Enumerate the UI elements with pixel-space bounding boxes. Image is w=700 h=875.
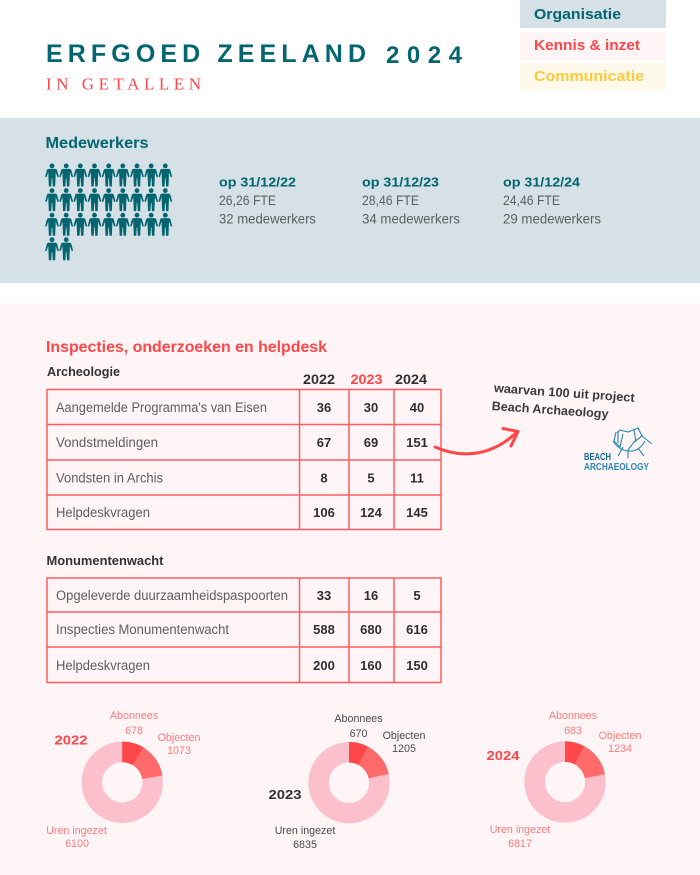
donut chart: 2023 bbox=[268, 713, 425, 851]
stat: 31/12/23: 34 medewerkers bbox=[362, 212, 460, 226]
table: archeologie: 11 bbox=[410, 470, 424, 486]
table: archeologie: Aangemelde Programma's van Eisen bbox=[56, 400, 267, 415]
legend: Organisatie bbox=[534, 6, 621, 23]
callout: beach archaeology: Beach Archaeology bbox=[491, 399, 609, 421]
stat: 31/12/22: op 31/12/22 bbox=[219, 176, 296, 190]
title: IN GETALLEN bbox=[46, 74, 201, 94]
stat: 31/12/24 bbox=[503, 176, 601, 226]
donut chart: 2022: 2022 bbox=[54, 732, 88, 748]
year headers bbox=[303, 372, 428, 387]
donut chart: 2023: Uren ingezet bbox=[275, 825, 335, 837]
table: archeologie: 67 bbox=[317, 435, 331, 450]
panel: inspecties, onderzoeken en helpdesk bbox=[0, 303, 700, 875]
donut chart: 2022: Uren ingezet bbox=[46, 825, 107, 837]
logo: beach archaeology bbox=[584, 428, 652, 473]
table: monumentenwacht: 200 bbox=[313, 658, 335, 673]
stat: 31/12/24: op 31/12/24 bbox=[503, 176, 580, 190]
title: ERFGOED ZEELAND bbox=[46, 40, 366, 68]
donut chart: 2022: 678 bbox=[125, 725, 143, 737]
donut chart: 2022: Objecten bbox=[158, 732, 200, 744]
table: archeologie: 5 bbox=[367, 470, 375, 486]
title: 2024 bbox=[386, 42, 463, 69]
table: monumentenwacht: 680 bbox=[360, 622, 382, 637]
table: monumentenwacht: 33 bbox=[317, 588, 331, 603]
table: monumentenwacht: 5 bbox=[413, 588, 421, 603]
table: archeologie: Vondstmeldingen bbox=[56, 435, 158, 450]
table: archeologie bbox=[47, 390, 441, 530]
donut chart: 2022: Abonnees bbox=[110, 710, 158, 722]
donut chart: 2023: Abonnees bbox=[334, 713, 383, 725]
year headers: 2022 bbox=[303, 372, 335, 387]
panel: medewerkers bbox=[0, 118, 700, 283]
title bbox=[46, 40, 463, 94]
donut chart: 2023: Objecten bbox=[383, 730, 425, 742]
donut chart: 2024: 6817 bbox=[508, 838, 532, 850]
donut chart: 2023: 2023 bbox=[268, 787, 302, 802]
table: archeologie: 36 bbox=[317, 400, 331, 415]
table: monumentenwacht: Helpdeskvragen bbox=[56, 658, 150, 673]
table: monumentenwacht: 588 bbox=[313, 622, 335, 637]
donut chart: 2022: 6100 bbox=[65, 838, 89, 850]
donut chart: 2022 bbox=[46, 710, 200, 850]
donut chart: 2024: 2024 bbox=[486, 748, 520, 763]
table: monumentenwacht: Inspecties Monumentenwacht bbox=[56, 622, 229, 637]
table: archeologie: 40 bbox=[410, 400, 424, 415]
stat: 31/12/23: op 31/12/23 bbox=[362, 176, 439, 190]
donut chart: 2022: 1073 bbox=[167, 745, 191, 757]
table: monumentenwacht: 160 bbox=[360, 658, 382, 673]
stat: 31/12/24: 29 medewerkers bbox=[503, 212, 601, 226]
table: archeologie: 30 bbox=[364, 400, 378, 415]
donut chart: 2024: 1234 bbox=[608, 743, 632, 755]
stat: 31/12/24: 24,46 FTE bbox=[503, 193, 560, 208]
donut chart: 2024: Objecten bbox=[599, 730, 641, 742]
table: archeologie: 69 bbox=[364, 435, 378, 450]
icon: 29 medewerkers pictogram bbox=[45, 164, 172, 260]
subheading: monumentenwacht: Monumentenwacht bbox=[46, 553, 164, 568]
year headers: 2023 bbox=[350, 372, 383, 387]
heading: inspecties: Inspecties, onderzoeken en helpdesk bbox=[46, 339, 327, 356]
logo: beach archaeology: ARCHAEOLOGY bbox=[584, 462, 649, 473]
donut chart: 2024: Uren ingezet bbox=[490, 824, 550, 836]
heading: medewerkers: Medewerkers bbox=[46, 135, 149, 152]
donut chart: 2023: 1205 bbox=[392, 743, 416, 755]
table: monumentenwacht: Opgeleverde duurzaamheidspaspoorten bbox=[56, 588, 288, 603]
stat: 31/12/23: 28,46 FTE bbox=[362, 193, 419, 208]
table: archeologie: 124 bbox=[360, 505, 383, 520]
table: archeologie: 151 bbox=[406, 435, 428, 450]
table: monumentenwacht: 16 bbox=[364, 588, 378, 603]
year headers: 2024 bbox=[395, 372, 428, 387]
legend: Communicatie bbox=[534, 68, 644, 85]
callout: beach archaeology bbox=[491, 381, 636, 423]
donut chart: 2023: 6835 bbox=[293, 839, 317, 851]
donut chart: 2024 bbox=[486, 710, 641, 850]
donut chart: 2023: 670 bbox=[350, 728, 367, 740]
table: archeologie: Helpdeskvragen bbox=[56, 505, 150, 520]
logo: beach archaeology: BEACH bbox=[584, 452, 611, 463]
table: archeologie: 145 bbox=[406, 505, 428, 520]
callout: beach archaeology: waarvan 100 uit project bbox=[492, 381, 636, 405]
table: monumentenwacht: 616 bbox=[406, 622, 428, 637]
table: monumentenwacht: 150 bbox=[406, 658, 428, 673]
table: archeologie: 106 bbox=[313, 505, 335, 520]
table: archeologie: Vondsten in Archis bbox=[56, 470, 163, 486]
table: archeologie: 8 bbox=[320, 470, 328, 486]
stat: 31/12/22: 26,26 FTE bbox=[219, 193, 276, 208]
stat: 31/12/22 bbox=[219, 176, 316, 226]
stat: 31/12/22: 32 medewerkers bbox=[219, 212, 316, 226]
stat: 31/12/23 bbox=[362, 176, 460, 226]
arrow bbox=[435, 428, 518, 454]
legend bbox=[520, 0, 666, 91]
table: monumentenwacht bbox=[47, 578, 441, 682]
subheading: archeologie: Archeologie bbox=[47, 364, 120, 379]
donut chart: 2024: Abonnees bbox=[549, 710, 597, 722]
legend: Kennis & inzet bbox=[534, 37, 640, 54]
donut chart: 2024: 683 bbox=[564, 725, 582, 737]
